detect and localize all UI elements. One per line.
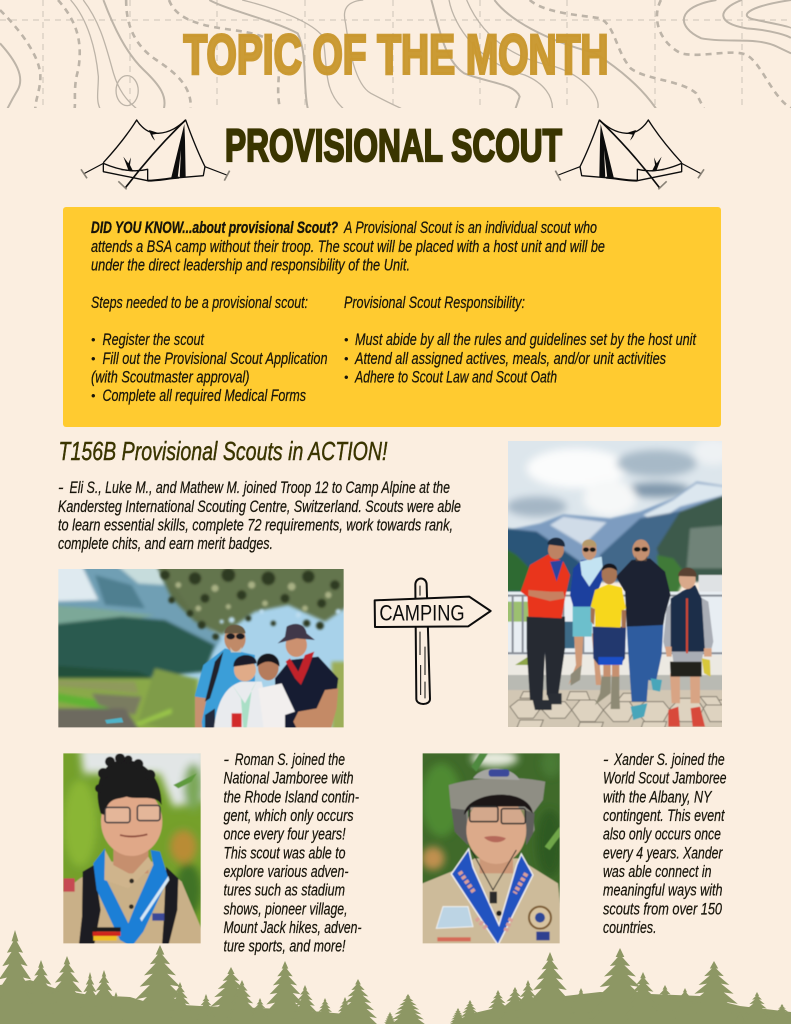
text block: responsibility list: Provisional Scout Responsibility: — [344, 294, 525, 312]
person: teen in blue jacket — [568, 633, 602, 685]
text block: Roman S. story: Roman S. joined the — [235, 751, 345, 769]
person: bald man in black jacket — [627, 625, 663, 702]
icon: left tent — [81, 120, 230, 189]
text block: did you know intro: attends a BSA camp without their troop. The scout will be placed with a host unit and will be — [91, 238, 605, 256]
panel: did you know — [63, 207, 721, 427]
text block: Roman S. story: once every four years! — [224, 826, 346, 844]
title: topic of the month: TOPIC OF THE MONTH — [184, 22, 608, 86]
text block: steps list — [91, 294, 328, 405]
boy in white, cap — [213, 680, 264, 728]
text block: Xander S. story: Xander S. joined the — [613, 751, 725, 769]
man in blue shirt — [195, 648, 255, 738]
text block: Camp Alpine story: Kandersteg International Scouting Centre, Switzerland. Scouts were able — [58, 498, 461, 516]
text block: Xander S. story: also only occurs once — [603, 826, 721, 844]
icon: camping signpost — [375, 578, 491, 704]
text block: Camp Alpine story: to learn essential skills, complete 72 requirements, work towards rank, — [58, 517, 453, 535]
photo: Roman S. — [63, 753, 201, 944]
text block: responsibility list: Must abide by all the rules and guidelines set by the host unit — [355, 331, 697, 349]
text block: Xander S. story: - — [603, 751, 609, 769]
photo: Xander S. — [422, 753, 560, 944]
photo: group overlooking valley — [58, 569, 344, 728]
boy in white t-shirt — [260, 682, 296, 728]
text block: steps list: • — [91, 332, 96, 347]
text block: Xander S. story — [603, 751, 726, 937]
text block: Roman S. story: tures such as stadium — [224, 882, 345, 900]
text block: Roman S. story: shows, pioneer village, — [224, 900, 348, 918]
text block: Camp Alpine story: Eli S., Luke M., and Mathew M. joined Troop 12 to Camp Alpine at the — [70, 479, 450, 497]
text block: did you know intro — [91, 219, 605, 275]
text block: Roman S. story — [224, 751, 362, 956]
text block: Camp Alpine story — [58, 479, 461, 553]
text block: responsibility list — [344, 294, 697, 387]
text block: Xander S. story: with the Albany, NY — [603, 788, 712, 806]
person: man in red jacket — [527, 617, 565, 700]
forest silhouette footer — [0, 930, 791, 1024]
text block: steps list: Fill out the Provisional Scout Application — [102, 350, 328, 368]
text block: did you know intro: under the direct leadership and responsibility of the Unit. — [91, 257, 410, 275]
person: boy in yellow shirt — [603, 663, 619, 678]
text block: Xander S. story: World Scout Jamboree — [603, 770, 726, 788]
scout uniform shirt — [63, 861, 201, 944]
text block: Camp Alpine story: complete chits, and earn merit badges. — [58, 535, 273, 553]
text block: steps list: Register the scout — [102, 331, 205, 349]
text block: Xander S. story: scouts from over 150 — [603, 900, 723, 918]
text block: Roman S. story: National Jamboree with — [224, 770, 354, 788]
text block: Camp Alpine story: - — [58, 479, 64, 497]
text block: steps list: • — [91, 351, 96, 366]
text block: responsibility list: • — [344, 351, 349, 366]
icon: camping signpost: CAMPING — [379, 600, 465, 625]
man with hat, dark shirt — [274, 656, 339, 728]
text block: Roman S. story: the Rhode Island contin- — [224, 788, 359, 806]
text block: did you know intro: DID YOU KNOW...about provisional Scout? — [91, 219, 338, 237]
photo: group at fence with mountains — [508, 441, 722, 727]
text block: Xander S. story: meaningful ways with — [603, 882, 722, 900]
heading: provisional scouts in action: T156B Provisional Scouts in ACTION! — [58, 436, 388, 466]
text block: Xander S. story: countries. — [603, 919, 656, 937]
text block: Roman S. story: This scout was able to — [224, 844, 346, 862]
text block: Roman S. story: explore various adven- — [224, 863, 349, 881]
text block: responsibility list: • — [344, 370, 349, 385]
scout uniform shirt — [422, 858, 560, 944]
text block: did you know intro: A Provisional Scout is an individual scout who — [343, 219, 597, 237]
text block: responsibility list: Adhere to Scout Law and Scout Oath — [354, 369, 557, 387]
text block: responsibility list: Attend all assigned actives, meals, and/or unit activities — [354, 350, 666, 368]
text block: Roman S. story: ture sports, and more! — [224, 938, 346, 956]
text block: Roman S. story: - — [224, 751, 230, 769]
heading: provisional scout: PROVISIONAL SCOUT — [225, 120, 562, 171]
text block: Roman S. story: Mount Jack hikes, adven- — [224, 919, 362, 937]
text block: steps list: Complete all required Medical Forms — [102, 387, 306, 405]
text block: steps list: Steps needed to be a provisional scout: — [91, 294, 308, 312]
text block: Roman S. story: gent, which only occurs — [224, 807, 354, 825]
text block: Xander S. story: every 4 years. Xander — [603, 844, 724, 862]
text block: steps list: • — [91, 388, 96, 403]
text block: Xander S. story: contingent. This event — [603, 807, 726, 825]
icon: right tent — [555, 120, 704, 189]
text block: responsibility list: • — [344, 332, 349, 347]
text block: Xander S. story: was able connect in — [603, 863, 712, 881]
text block: steps list: (with Scoutmaster approval) — [91, 369, 250, 387]
topographic contour header pattern — [0, 0, 791, 108]
person: boy in vest — [670, 673, 700, 703]
